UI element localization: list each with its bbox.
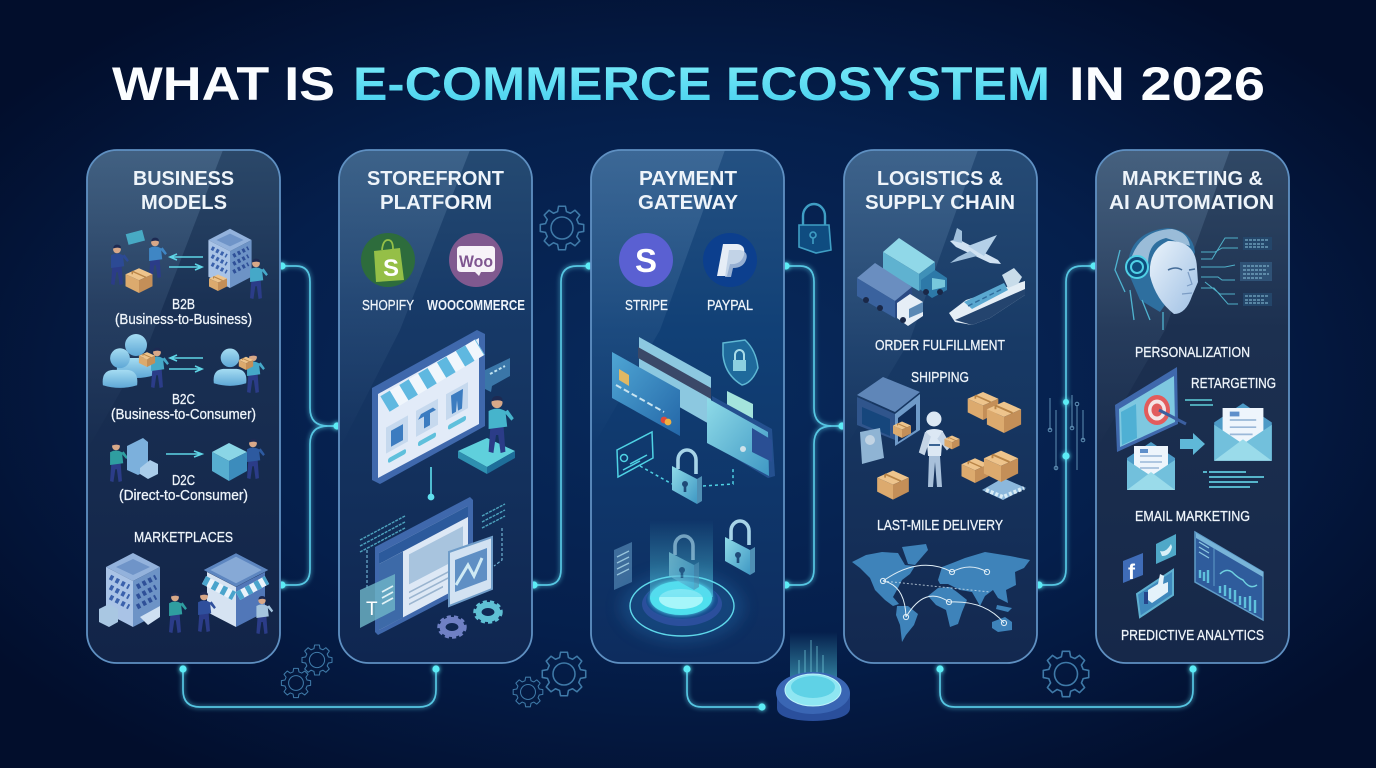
label: stripe: STRIPE (625, 297, 668, 314)
label: b2b: B2B (172, 296, 195, 313)
chart: world map routes (852, 544, 1030, 642)
icon: small arrows (1185, 400, 1213, 405)
label: b2c: (Business-to-Consumer) (111, 406, 256, 423)
label: order fulfillment: ORDER FULFILLMENT (875, 337, 1005, 354)
icon: padlock between panels (799, 204, 831, 253)
logo: stripe: S (635, 242, 657, 279)
connector inside storefront panel (428, 467, 434, 500)
icon: shield (723, 340, 758, 385)
panel: payment gateway (591, 150, 784, 663)
illustration: cardboard box (877, 471, 909, 500)
heading: payment gateway: PAYMENT (639, 167, 737, 190)
label: d2c: D2C (172, 472, 195, 489)
illustration: ai data lines (1201, 238, 1238, 304)
title: IN 2026 (1069, 57, 1265, 110)
icon: envelope right (1214, 403, 1272, 461)
heading: logistics and supply chain: LOGISTICS & (877, 167, 1003, 190)
illustration: airplane (950, 228, 1001, 264)
platform: data base (776, 632, 850, 721)
icon: padlock lower (725, 521, 755, 575)
illustration: target screen (1115, 367, 1186, 452)
illustration: ai data blocks (1240, 237, 1272, 306)
label: email marketing: EMAIL MARKETING (1135, 508, 1250, 525)
heading: logistics and supply chain (865, 167, 1015, 214)
logo: stripe (619, 233, 673, 287)
illustration: b2c (103, 334, 265, 393)
icon: outlined card (617, 432, 733, 486)
heading: business models: BUSINESS (133, 167, 234, 190)
heading: logistics and supply chain: SUPPLY CHAIN (865, 191, 1015, 214)
title (112, 57, 1265, 110)
title: WHAT IS (112, 57, 335, 110)
logo: woocommerce (449, 233, 503, 287)
heading: marketing and ai automation (1109, 167, 1274, 214)
illustration: warehouse (857, 377, 920, 464)
logo: shopify (361, 233, 415, 287)
icon: document (614, 542, 632, 590)
label: paypal: PAYPAL (707, 297, 753, 314)
illustration: marketplaces (99, 553, 273, 634)
icon: padlock (672, 450, 702, 504)
panel: business models (87, 150, 280, 663)
illustration: stacked boxes top (968, 392, 1021, 433)
icon: facebook: f (1128, 561, 1136, 584)
panel: logistics and supply chain (844, 150, 1037, 663)
label: b2c: B2C (172, 391, 195, 408)
icon: facebook (1123, 553, 1143, 584)
illustration: storefront window (372, 330, 485, 484)
illustration: d2c (110, 438, 265, 482)
illustration: web page editor (360, 497, 505, 635)
label: retargeting: RETARGETING (1191, 375, 1276, 392)
connector nodes (179, 262, 1197, 711)
chart: analytics dashboard (1195, 532, 1263, 620)
label: predictive analytics: PREDICTIVE ANALYTICS (1121, 627, 1264, 644)
label: marketplaces: MARKETPLACES (134, 529, 233, 546)
illustration: web page editor: T (366, 599, 378, 620)
label: d2c (119, 472, 248, 504)
icon: envelope left (1127, 442, 1175, 490)
illustration: teal truck (883, 238, 947, 298)
circuit dots near panel five (1048, 395, 1085, 470)
heading: payment gateway: GATEWAY (638, 191, 738, 214)
illustration: boxes on pallet (962, 451, 1026, 500)
illustration: credit cards (612, 337, 711, 436)
panel: marketing and ai automation (1096, 150, 1289, 663)
title: E-COMMERCE ECOSYSTEM (353, 57, 1050, 110)
logo: shopify: S (383, 255, 399, 282)
icon: block arrow (1180, 433, 1205, 455)
icon: twitter (1156, 534, 1176, 564)
label: b2b: (Business-to-Business) (115, 311, 252, 328)
logo: paypal (703, 233, 757, 287)
illustration: robot (920, 412, 960, 487)
illustration: ai head (1115, 228, 1198, 330)
illustration: person on teal platform (458, 358, 515, 474)
logo: woocommerce: Woo (459, 252, 493, 271)
label: shipping: SHIPPING (911, 369, 969, 386)
panel: storefront platform (339, 150, 532, 663)
heading: business models (133, 167, 234, 214)
heading: storefront platform: STOREFRONT (367, 167, 504, 190)
label: b2b (115, 296, 252, 328)
label: personalization: PERSONALIZATION (1135, 344, 1250, 361)
heading: storefront platform (367, 167, 504, 214)
label: shopify: SHOPIFY (362, 297, 414, 314)
gear icons (281, 206, 1089, 707)
illustration: blue truck (857, 263, 923, 326)
heading: marketing and ai automation: MARKETING & (1122, 167, 1263, 190)
heading: marketing and ai automation: AI AUTOMATION (1109, 191, 1274, 214)
illustration: glowing security platform (620, 520, 744, 643)
heading: payment gateway (638, 167, 738, 214)
connector lines between panels (183, 266, 1193, 707)
label: last-mile delivery: LAST-MILE DELIVERY (877, 517, 1003, 534)
label: woocommerce: WOOCOMMERCE (427, 297, 525, 314)
label: d2c: (Direct-to-Consumer) (119, 487, 248, 504)
code lines (1203, 472, 1264, 487)
illustration: b2b (111, 229, 268, 299)
illustration: wallet (707, 391, 775, 478)
heading: business models: MODELS (141, 191, 227, 214)
label: b2c (111, 391, 256, 423)
heading: storefront platform: PLATFORM (380, 191, 492, 214)
illustration: cargo ship (949, 268, 1025, 325)
icon: gears (439, 602, 501, 637)
icon: thumbs up (1137, 570, 1173, 617)
